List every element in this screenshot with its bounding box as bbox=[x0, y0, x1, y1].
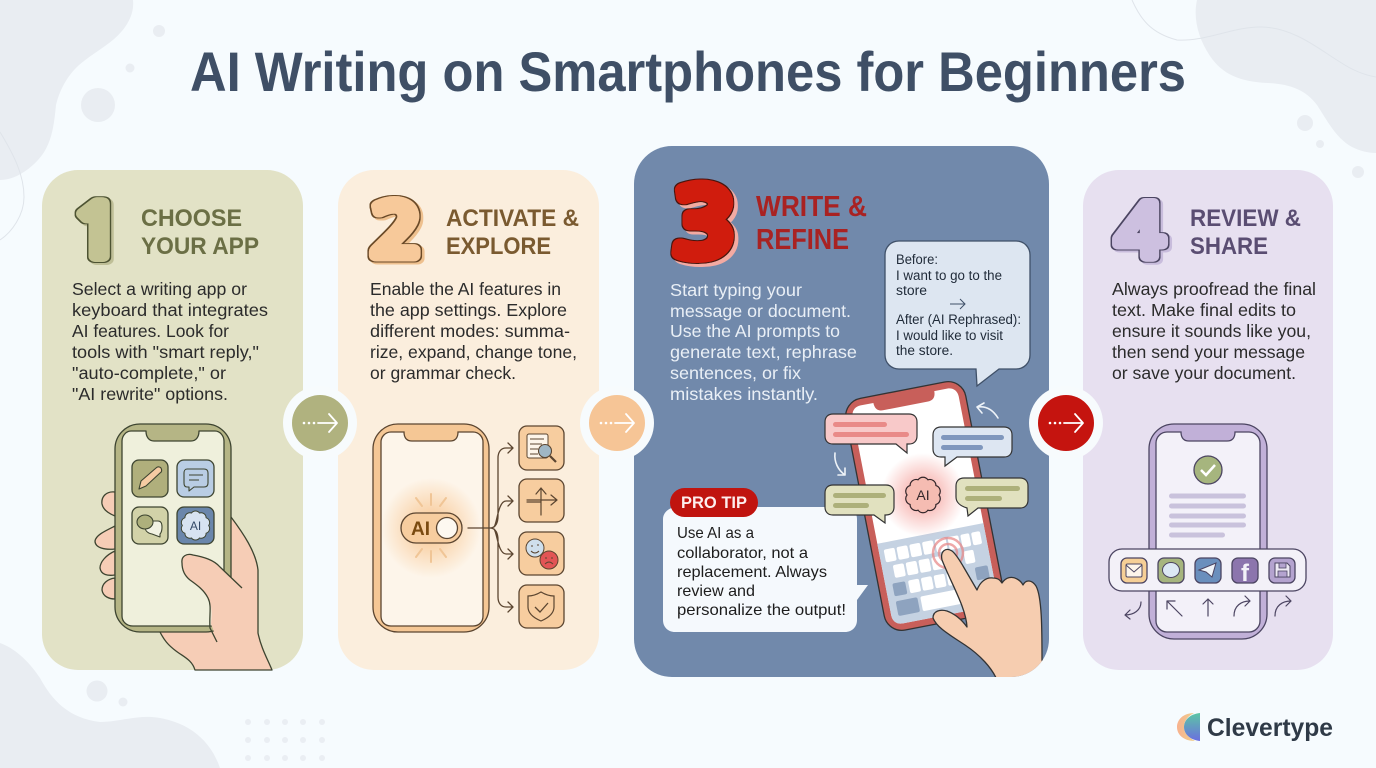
illustration: phone with chat bubbles and hand bbox=[825, 379, 1049, 680]
icon: pencil bbox=[139, 467, 162, 489]
callout: before and after: Before: bbox=[896, 252, 938, 267]
bubble: olive left bbox=[825, 485, 894, 523]
body text: mistakes instantly. bbox=[670, 384, 818, 404]
body text: the app settings. Explore bbox=[370, 300, 567, 320]
number 4: 4 bbox=[1115, 197, 1165, 268]
bubble: blue bbox=[933, 427, 1012, 466]
callout: pro tip: Use AI as a bbox=[677, 525, 754, 542]
body text: Always proofread the final bbox=[1112, 279, 1316, 299]
arrow 2 bbox=[580, 386, 654, 460]
title: AI Writing on Smartphones for Beginners bbox=[190, 40, 1186, 103]
heading: activate and explore: EXPLORE bbox=[446, 233, 551, 260]
icon: summarize document with magnifier bbox=[519, 426, 564, 470]
callout: before and after: I want to go to the bbox=[896, 268, 1002, 283]
icon: AI brain: AI bbox=[916, 487, 930, 503]
toggle: AI switch bbox=[401, 513, 462, 543]
icon: AI brain: AI bbox=[190, 519, 201, 533]
callout: pro tip: collaborator, not a bbox=[677, 545, 808, 562]
arrow 1 bbox=[283, 386, 357, 460]
number 3: 3 bbox=[672, 179, 736, 270]
body text: ensure it sounds like you, bbox=[1112, 321, 1311, 341]
callout: pro tip bbox=[663, 488, 868, 632]
illustration: phone with AI toggle bbox=[373, 424, 564, 632]
panel: step 2 activate and explore bbox=[338, 170, 599, 670]
body text: "AI rewrite" options. bbox=[72, 384, 228, 404]
panel: step 4 review and share bbox=[1083, 170, 1333, 670]
icon: messages bbox=[1158, 558, 1184, 583]
hand tapping bbox=[933, 549, 1049, 680]
bubble: red bbox=[825, 414, 917, 453]
logo: Clevertype: Clevertype bbox=[1207, 714, 1333, 742]
icon: AI brain bbox=[906, 477, 940, 513]
body text: Enable the AI features in bbox=[370, 279, 561, 299]
callout: pro tip: PRO TIP bbox=[681, 493, 747, 512]
panel: step 3 write and refine bbox=[634, 146, 1049, 680]
share arrows bbox=[1125, 596, 1291, 619]
body text: tools with "smart reply," bbox=[72, 342, 259, 362]
arrow 3 bbox=[1029, 386, 1103, 460]
heading: activate and explore: ACTIVATE & bbox=[446, 205, 579, 232]
body text: sentences, or fix bbox=[670, 363, 801, 383]
body text bbox=[72, 279, 268, 404]
icon: facebook: f bbox=[1241, 560, 1250, 587]
icon: check badge bbox=[1194, 456, 1222, 484]
body text bbox=[1112, 279, 1316, 383]
text lines bbox=[1169, 494, 1246, 538]
icon: message bubble bbox=[184, 469, 208, 491]
icon: save bbox=[1269, 558, 1295, 583]
icon: tone faces bbox=[519, 532, 564, 575]
callout: pro tip: personalize the output! bbox=[677, 602, 846, 619]
icon: chat bubbles bbox=[137, 515, 162, 537]
icon: AI brain bbox=[181, 511, 210, 540]
callout: before and after bbox=[885, 241, 1030, 386]
body text: or save your document. bbox=[1112, 363, 1296, 383]
icon: mail bbox=[1121, 558, 1147, 583]
body text: Select a writing app or bbox=[72, 279, 247, 299]
number 2: 2 bbox=[370, 195, 422, 267]
body text: Use the AI prompts to bbox=[670, 321, 840, 341]
body text: text. Make final edits to bbox=[1112, 300, 1296, 320]
body text: keyboard that integrates bbox=[72, 300, 268, 320]
heading: write and refine bbox=[756, 191, 867, 256]
callout: before and after: the store. bbox=[896, 343, 953, 358]
body text: AI features. Look for bbox=[72, 321, 229, 341]
icon: grammar check shield bbox=[519, 585, 564, 628]
tap ripple bbox=[933, 538, 963, 568]
illustration: phone with share icons bbox=[1109, 424, 1306, 639]
heading: write and refine: REFINE bbox=[756, 224, 849, 256]
body text: Start typing your bbox=[670, 280, 802, 300]
branching arrows bbox=[468, 443, 513, 612]
number 1: 1 bbox=[71, 196, 123, 268]
arrows: rewrite cycle bbox=[835, 403, 998, 475]
icon: facebook bbox=[1232, 558, 1258, 587]
heading: activate and explore bbox=[446, 205, 579, 260]
illustration: hand holding phone with app icons bbox=[95, 424, 272, 670]
body text: "auto-complete," or bbox=[72, 363, 226, 383]
heading: write and refine: WRITE & bbox=[756, 191, 867, 223]
heading: review and share: REVIEW & bbox=[1190, 205, 1301, 232]
heading: choose your app bbox=[141, 205, 259, 260]
body text: different modes: summa- bbox=[370, 321, 570, 341]
body text bbox=[370, 279, 577, 383]
callout: pro tip: review and bbox=[677, 583, 755, 600]
bubble: olive right bbox=[956, 478, 1028, 516]
body text: generate text, rephrase bbox=[670, 342, 857, 362]
heading: review and share: SHARE bbox=[1190, 233, 1268, 260]
panel: step 1 choose your app bbox=[42, 170, 303, 670]
body text: message or document. bbox=[670, 301, 851, 321]
heading: review and share bbox=[1190, 205, 1301, 260]
body text: or grammar check. bbox=[370, 363, 516, 383]
toggle: AI switch: AI bbox=[411, 519, 430, 540]
heading: choose your app: YOUR APP bbox=[141, 233, 259, 260]
icon: telegram bbox=[1195, 558, 1221, 583]
body text bbox=[670, 280, 857, 404]
icon: expand arrows bbox=[519, 479, 564, 522]
body text: then send your message bbox=[1112, 342, 1305, 362]
share bar bbox=[1109, 549, 1306, 591]
callout: pro tip: replacement. Always bbox=[677, 564, 827, 581]
callout: before and after: After (AI Rephrased): bbox=[896, 312, 1021, 327]
callout: before and after: store bbox=[896, 283, 927, 298]
callout: before and after: I would like to visit bbox=[896, 328, 1003, 343]
heading: choose your app: CHOOSE bbox=[141, 205, 242, 232]
body text: rize, expand, change tone, bbox=[370, 342, 577, 362]
